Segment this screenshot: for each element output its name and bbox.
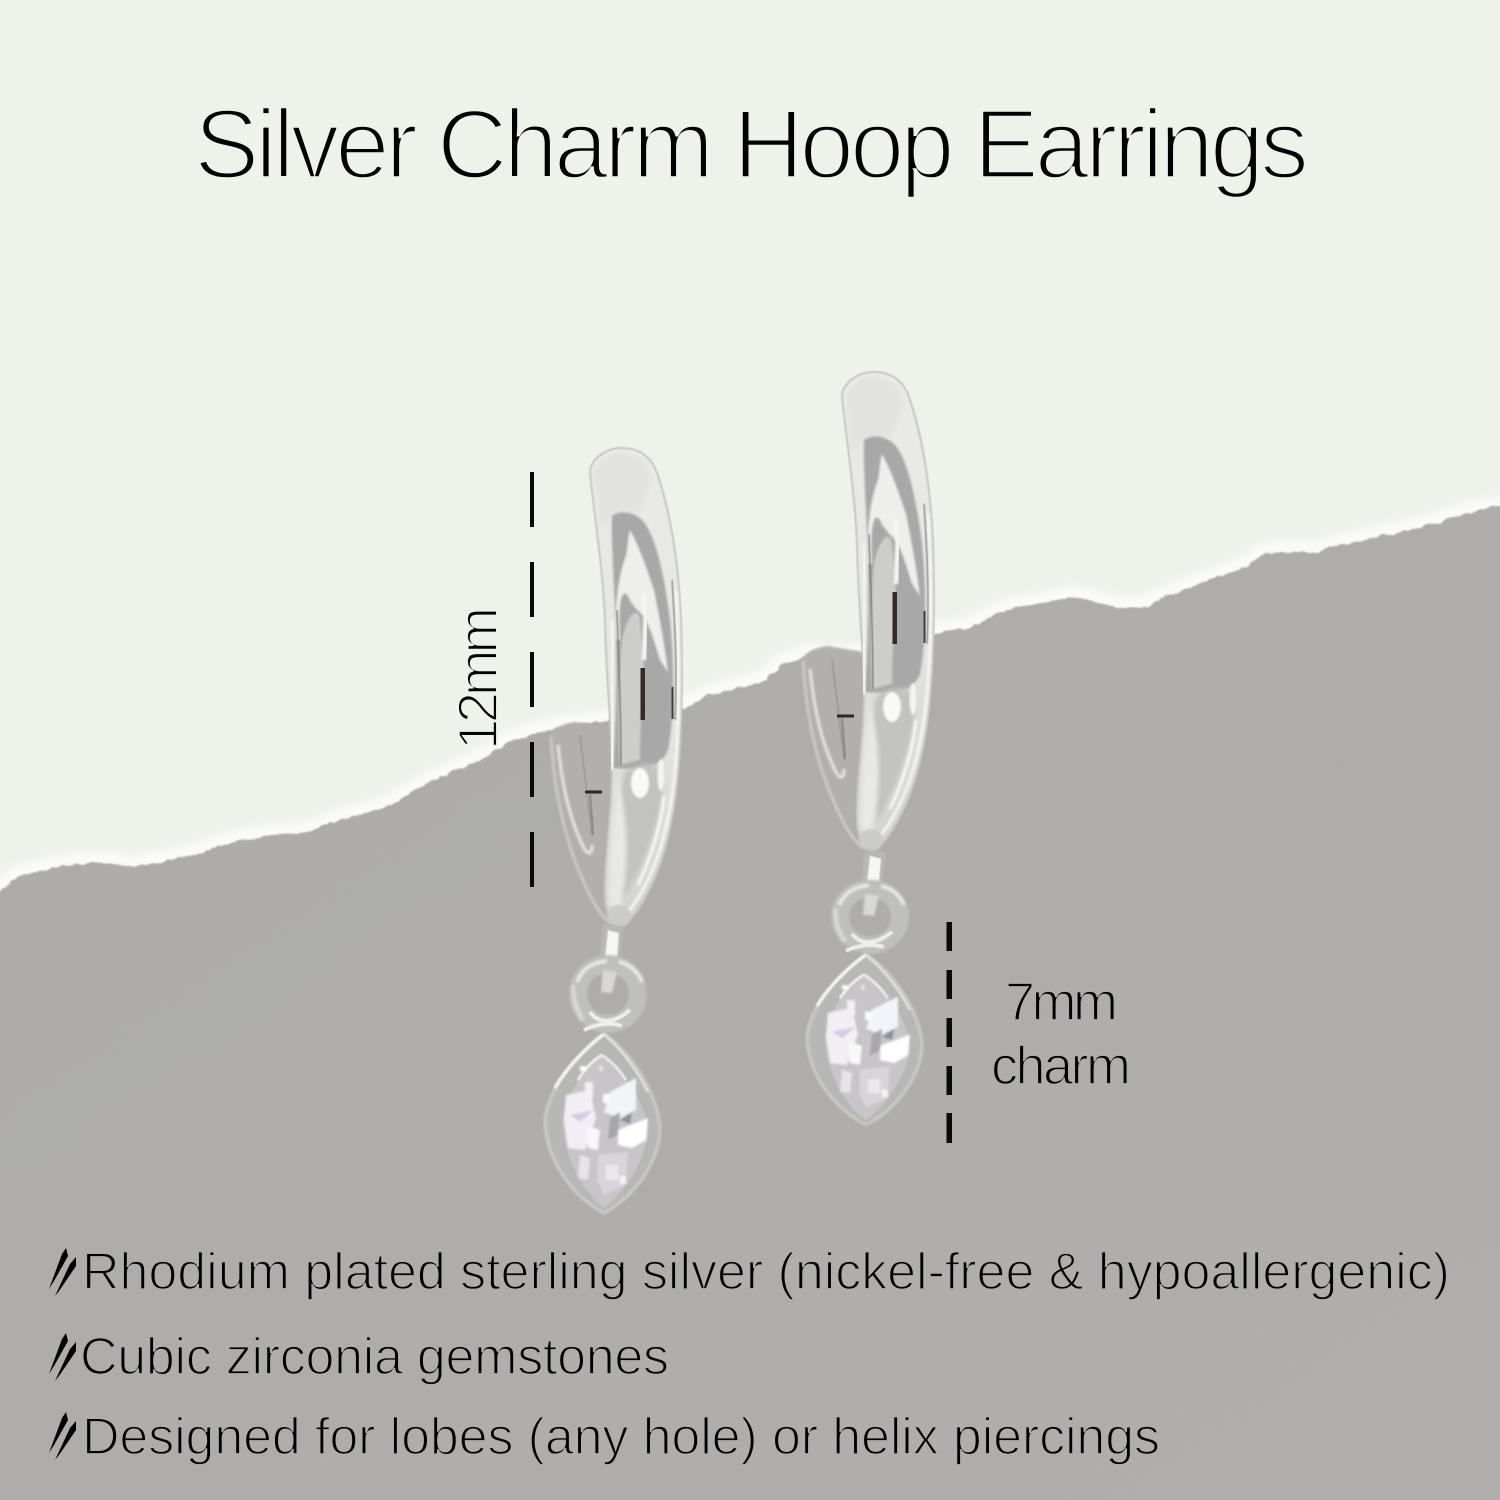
title: Silver Charm Hoop Earrings xyxy=(194,89,1309,199)
torn white fringe xyxy=(0,504,1500,900)
bullet item: piercings: Designed for lobes (any hole) or helix piercings xyxy=(82,1408,1160,1466)
bullet item: material: Rhodium plated sterling silver (nickel-free & hypoallergenic) xyxy=(82,1243,1450,1301)
right earring xyxy=(802,372,934,1125)
right earring hoop xyxy=(802,372,934,851)
grey lower background xyxy=(0,500,1500,1500)
bullet item: gemstones: Cubic zirconia gemstones xyxy=(80,1328,669,1386)
label: 7mm charm: 7mm xyxy=(1005,972,1118,1032)
left earring hoop xyxy=(550,448,682,927)
label: 7mm charm: charm xyxy=(991,1036,1131,1096)
left earring marquise charm xyxy=(545,924,660,1213)
left earring xyxy=(545,448,682,1213)
dimension line: 12mm hoop xyxy=(530,472,534,887)
right earring marquise charm xyxy=(807,850,922,1125)
feature list xyxy=(49,1243,1450,1466)
label: 12mm: 12mm xyxy=(446,607,509,750)
dimension line: 7mm charm xyxy=(946,922,952,1143)
label: 7mm charm xyxy=(991,972,1131,1096)
